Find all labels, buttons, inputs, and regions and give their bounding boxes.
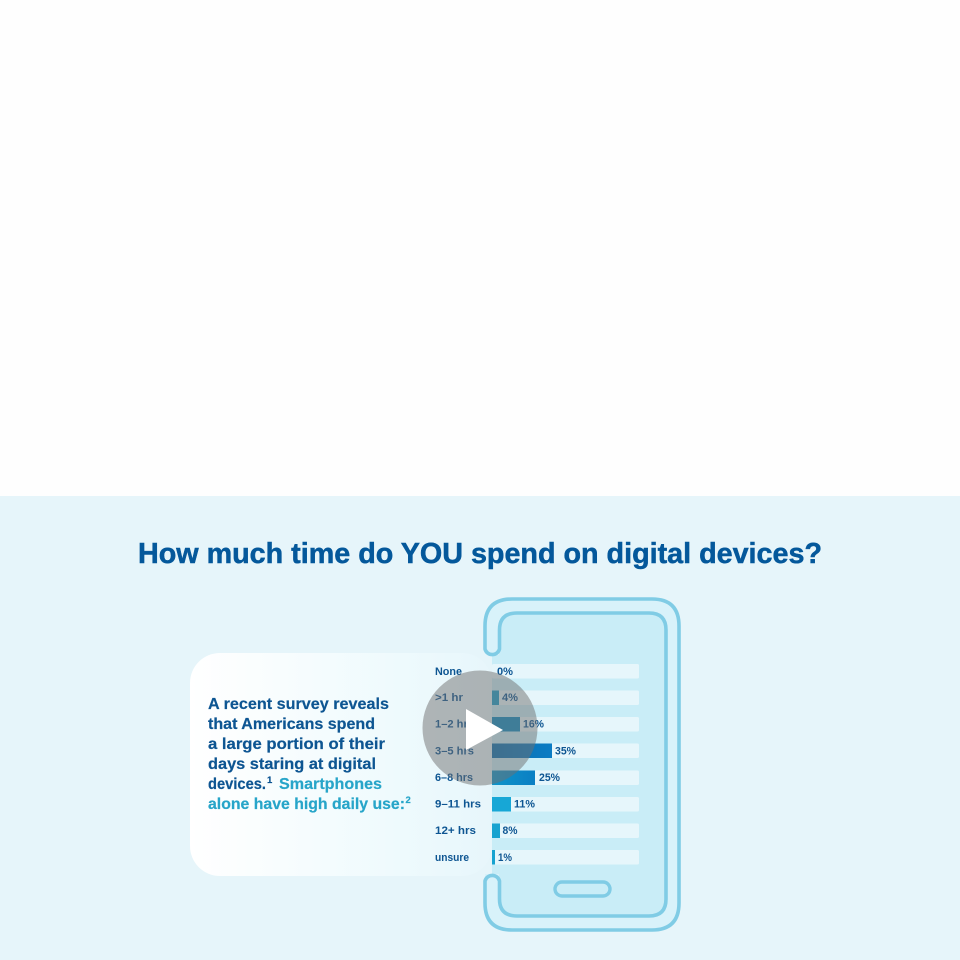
category labels: 9–11 hrs [435,798,481,810]
category labels: 1–2 hrs [435,718,474,730]
text block: survey intro: A recent survey reveals [208,696,389,713]
category labels: unsure [435,852,469,864]
text block: survey intro: days staring at digital [208,756,376,773]
text block: survey intro: Smartphones [279,776,382,793]
value labels [497,666,576,864]
category labels: 3–5 hrs [435,746,474,758]
value labels: 4% [502,692,518,704]
category labels: 6–8 hrs [435,772,473,784]
category labels: None [435,666,462,678]
phone home button [555,882,610,896]
text block: survey intro: 2 [406,795,411,806]
category labels [435,666,481,864]
value labels: 0% [497,666,513,678]
phone screen [492,613,666,916]
text block: survey intro: 1 [267,775,273,786]
bar chart: daily hours [435,664,639,864]
panel: phone illustration [485,599,679,930]
value labels: 8% [502,825,518,837]
category labels: >1 hr [435,692,464,704]
value labels: 35% [555,746,576,758]
panel: survey text card [190,653,492,876]
text block: survey intro [208,696,411,813]
icon: video play button [422,670,538,786]
background band [0,496,960,960]
text block: survey intro: a large portion of their [208,736,385,753]
value labels: 1% [498,852,512,864]
bars [492,690,552,864]
text block: survey intro: devices. [208,776,266,793]
phone outline [485,599,679,930]
text block: survey intro: that Americans spend [208,716,375,733]
value labels: 11% [514,798,535,810]
category labels: 12+ hrs [435,825,476,837]
title: How much time do YOU spend on digital devices? [138,538,822,570]
row tracks [492,664,639,864]
value labels: 16% [523,718,544,730]
phone body fill [485,599,679,930]
value labels: 25% [539,772,560,784]
text block: survey intro: alone have high daily use: [208,796,405,813]
